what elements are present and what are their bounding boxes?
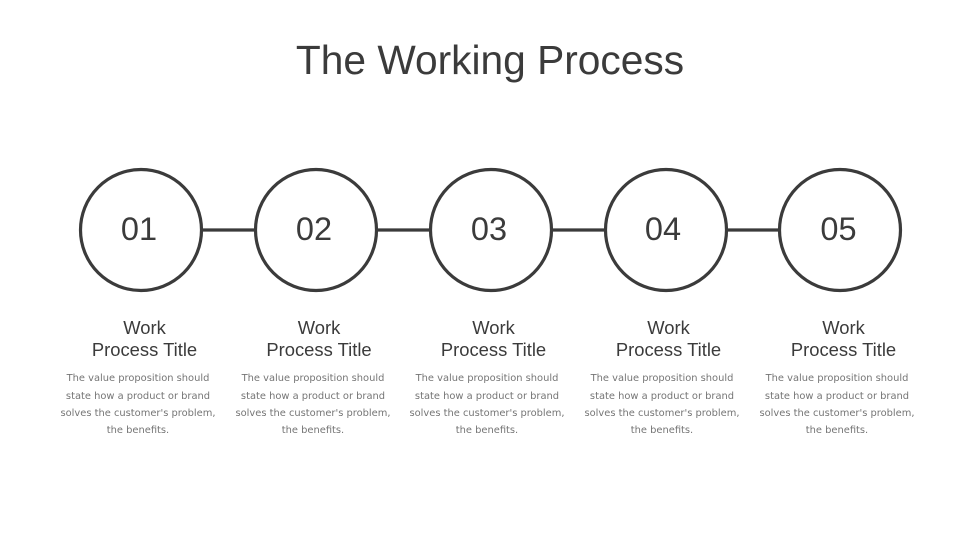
step 02 text (236, 317, 390, 436)
step 01 description: state how a product or brand (66, 391, 210, 402)
step 03 text (410, 317, 564, 436)
process timeline (80, 170, 900, 290)
step 02 description: The value proposition should (241, 373, 384, 384)
step 02 heading: Work (298, 317, 341, 338)
step 03 description: the benefits. (456, 425, 518, 436)
step 02 description: state how a product or brand (241, 391, 385, 402)
step 01 circle (80, 170, 202, 290)
title: The Working Process (296, 37, 684, 83)
step 05 circle: 05 (820, 211, 857, 247)
step 02 description: the benefits. (282, 425, 344, 436)
step 05 description: The value proposition should (765, 373, 908, 384)
step 01 description: the benefits. (107, 425, 169, 436)
connector 4 to 5 (727, 228, 779, 232)
step 03 heading: Process Title (441, 339, 546, 360)
step 03 circle (430, 170, 552, 290)
step 01 heading: Process Title (92, 339, 197, 360)
step 05 description: state how a product or brand (765, 391, 909, 402)
step 03 description: state how a product or brand (415, 391, 559, 402)
step 04 circle: 04 (645, 211, 681, 247)
step 03 description: solves the customer's problem, (410, 408, 564, 419)
step 05 heading: Work (822, 317, 866, 338)
connector 3 to 4 (552, 228, 605, 232)
step 01 circle: 01 (121, 211, 157, 247)
connector 1 to 2 (202, 228, 255, 232)
step 02 circle: 02 (296, 211, 332, 247)
step 01 description: solves the customer's problem, (61, 408, 215, 419)
step 02 circle (256, 170, 376, 290)
step 01 heading: Work (123, 317, 167, 338)
step 04 heading: Work (647, 317, 691, 338)
step 04 description: state how a product or brand (590, 391, 734, 402)
step 04 heading: Process Title (616, 339, 721, 360)
step 04 description: the benefits. (631, 425, 693, 436)
step 01 text (61, 317, 215, 436)
step 03 heading: Work (472, 317, 516, 338)
step 02 description: solves the customer's problem, (236, 408, 390, 419)
step 05 text (760, 317, 914, 436)
step 05 circle (780, 170, 900, 290)
step 01 description: The value proposition should (66, 373, 209, 384)
step 03 description: The value proposition should (415, 373, 558, 384)
step 05 description: the benefits. (806, 425, 868, 436)
step 04 description: solves the customer's problem, (585, 408, 739, 419)
connector 2 to 3 (377, 228, 430, 232)
step 04 circle (606, 170, 726, 290)
step 05 heading: Process Title (791, 339, 896, 360)
step 04 description: The value proposition should (590, 373, 733, 384)
step 02 heading: Process Title (266, 339, 372, 360)
step 05 description: solves the customer's problem, (760, 408, 914, 419)
step 03 circle: 03 (471, 211, 507, 247)
step 04 text (585, 317, 739, 436)
